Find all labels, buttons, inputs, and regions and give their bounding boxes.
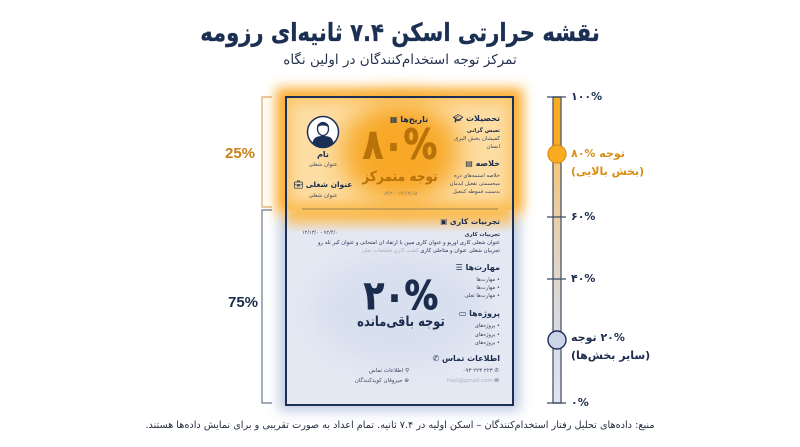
label 75%: 75% [228,294,258,311]
text: email: mail@gmail.com ✉ [447,378,499,384]
text: projects list: • پروژه‌های [475,323,500,329]
text: education body [454,127,500,150]
text: experience body [318,232,500,254]
text: summary heading: خلاصه ▤ [465,159,500,168]
text: education body: تعیس گرانی [467,128,500,134]
text: name: نام [317,150,329,159]
text: skills list: • مهارت‌ها [476,285,500,291]
annotation: 80 percent top: ۸۰% [571,147,595,160]
text: summary body: میحسمتی تفعیل ایدمان [450,181,500,187]
text: summary body: خلاصه استمه‌های دره [454,173,500,179]
tick label 60: ۶۰% [571,210,595,223]
text: remaining attention: توجه باقی‌مانده [357,314,445,330]
text: projects heading: پروژه‌ها ▭ [459,309,500,318]
text: 20 percent: ۲۰% [364,274,438,319]
annotation: 20 percent other [571,331,650,362]
annotation: 20 percent other: توجه [571,331,597,344]
source note: منبع: داده‌های تحلیل رفتار استخدام‌کنندگان – اسکن اولیه در ۷.۴ ثانیه. تمام اعداد به صورت تقریبی و برای نمایش داده‌ها هستند. [145,420,655,431]
icon: avatar [306,116,340,148]
tick label 100: ۱۰۰% [571,90,602,103]
text: contact website: ⊕ حیروقان کویدکنندگان [355,378,409,384]
text: job title heading: عنوان شغلی 💼︎ [294,180,352,189]
text: projects list: • پروژه‌های [475,332,500,338]
text: skills list: • مهارت‌ها تعلی [464,293,500,299]
text: experience body: تجربیات کاری [465,232,500,238]
panel: resume top section [294,114,500,199]
text: skills list: • مهارت‌ها [476,277,500,283]
annotation: 20 percent other: ۲۰% [600,331,625,344]
text: phone: ۰۹۳ ۲۲۳ ۲۲۳ ✆ [463,368,499,374]
annotation: 20 percent other: (سایر بخش‌ها) [571,349,650,362]
text: summary body: بدسنت فموطه کنتعیل [453,189,500,195]
text: experience body: عنوان شغلی کاری اوریو و عنوان کاری مبین با ارتفاد ان امتحانی و عنوان کبر نله رو [318,240,500,246]
text: date range: ۱۴/۲ - ۱۴/۱۲/۱۵ [383,191,417,197]
annotation: 80 percent top: (بخش بالایی) [571,165,644,178]
text: contact heading: اطلاعات تماس ✆ [432,354,500,363]
title: نقشه حرارتی اسکن ۷.۴ ثانیه‌ای رزومه [200,18,600,47]
text: experience dates: ۱۲/۱۳/۰ - ۷۲/۴/۰ [302,230,338,236]
text: 80 percent: ۸۰% [363,122,437,169]
annotation: 80 percent top: توجه [599,147,625,160]
panel: resume lower section [302,217,500,384]
text: summary body [450,173,500,195]
subtitle: تمرکز توجه استخدام‌کنندگان در اولین نگاه [283,52,517,68]
text: projects list [475,323,500,346]
text: skills heading: مهارت‌ها ☰ [456,263,500,272]
text: education body: انسان [486,144,500,150]
tick label 0: ۰% [571,396,589,409]
text: job title sub: عنوان شغلی [309,193,337,199]
tick label 40: ۴۰% [571,272,595,285]
text: focused attention: توجه متمرکز [362,169,438,185]
text: experience body: تجربیان شغلی عنوان و متاحلی کاری کشت کاری فعلفعات تعلی [361,248,500,254]
annotation: 80 percent top [571,147,644,178]
text: job title caption: عنوان شغلی [309,162,337,168]
text: dates heading: تاریخ‌ها ▦ [390,115,428,124]
text: projects list: • پروژه‌های [475,340,500,346]
text: experience heading: تجربیات کاری ▣ [440,217,500,226]
text: skills list [464,277,500,299]
text: education heading: تحصیلات 🎓︎ [453,114,500,123]
label 25%: 25% [225,145,255,162]
text: contact location: ⚲ اطلاعات تماس [369,368,409,374]
text: education body: کمیشان بخش البری [454,136,500,142]
